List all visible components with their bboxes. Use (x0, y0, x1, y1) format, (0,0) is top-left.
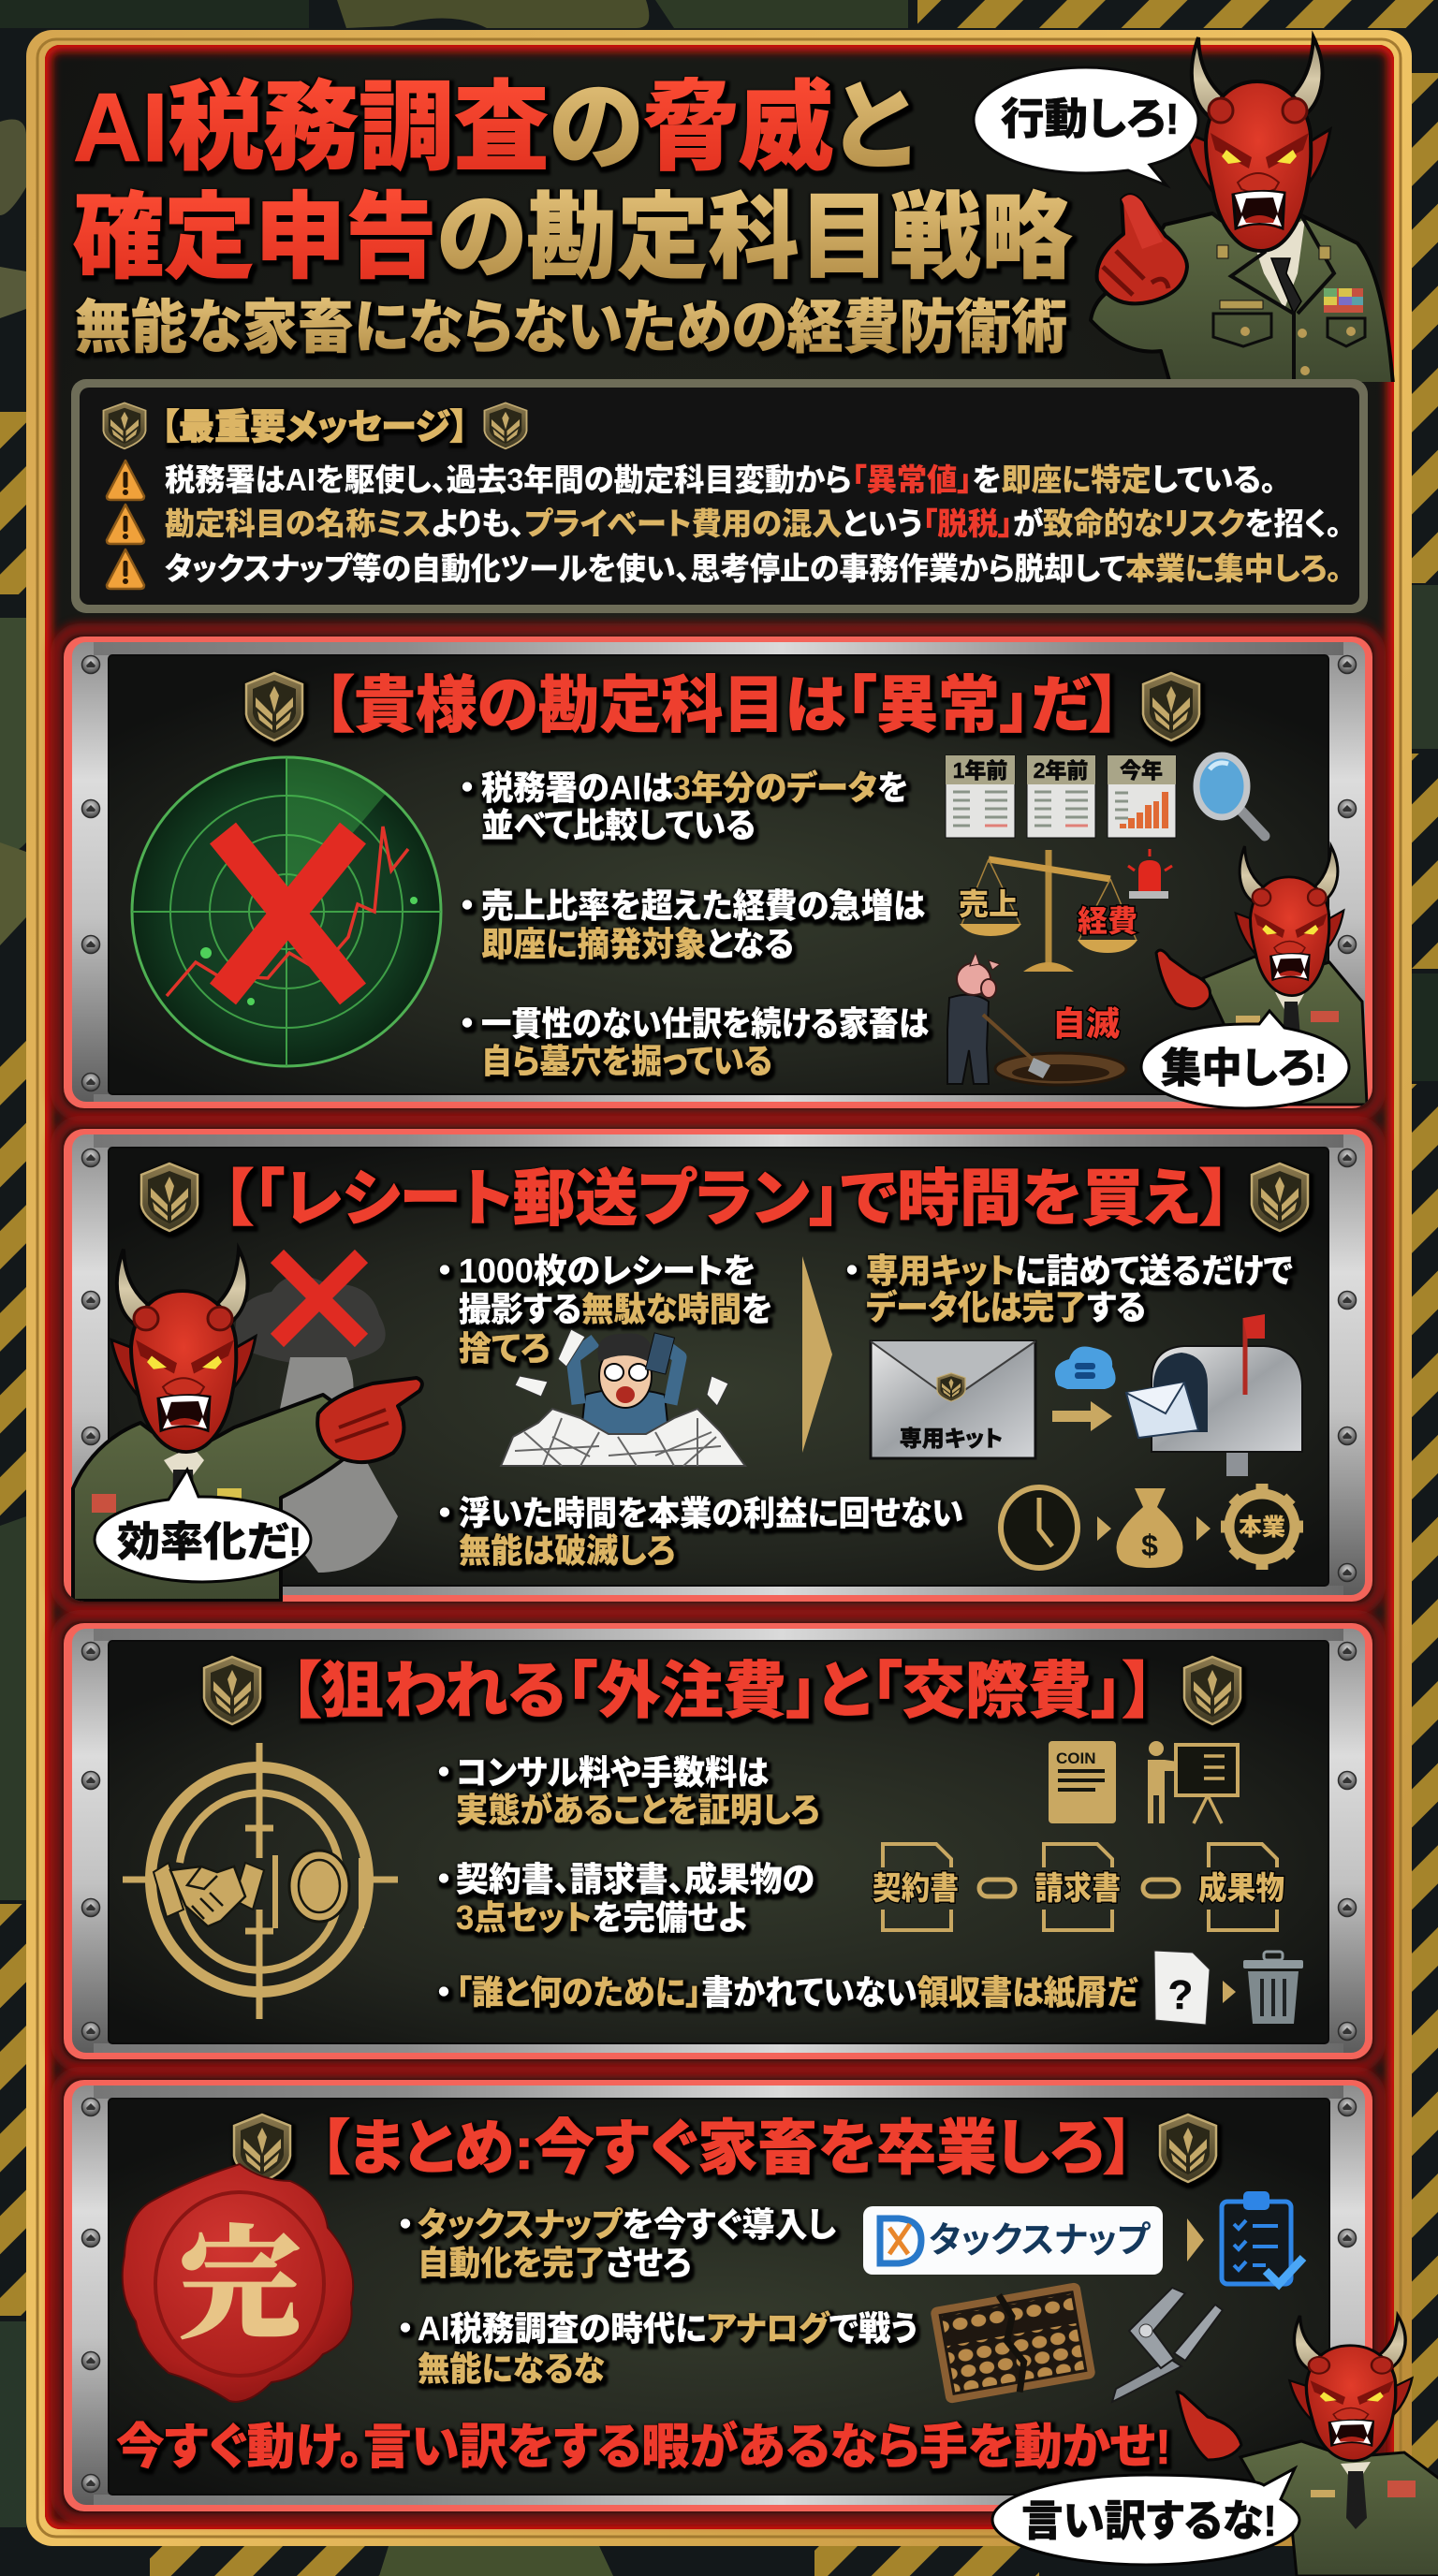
gold arrow to mailbox (1052, 1401, 1112, 1431)
devil body and pointing hand (73, 1378, 422, 1601)
dedicated kit envelope: 専用キット (900, 1427, 1003, 1452)
devil body and pointing hand (1156, 950, 1367, 1105)
panel 3 text: 実態があることを証明しろ (456, 1791, 819, 1829)
dedicated kit envelope (871, 1341, 1035, 1458)
panel 3 text: 3点セットを完備せよ (456, 1898, 747, 1937)
document: invoice (1034, 1844, 1121, 1930)
devil commander 4 with speech bubble (992, 2316, 1438, 2576)
devil commander 3 with speech bubble (73, 1249, 422, 1601)
pig-headed man digging a hole (947, 953, 1126, 1085)
chain link (1143, 1880, 1179, 1896)
title line 1: AI税務調査の脅威と (73, 74, 913, 183)
wax seal (123, 2164, 353, 2402)
speech bubble: 効率化だ (95, 1470, 311, 1582)
three-year comparison tables (946, 755, 1176, 838)
panel 1 text: 自ら墓穴を掘っている (481, 1042, 772, 1080)
document: contract (873, 1844, 959, 1930)
TaxSnap logo (863, 2206, 1163, 2275)
panel 1 text: 即座に摘発対象となる (481, 925, 794, 963)
balance scale (959, 850, 1137, 972)
title (73, 74, 1072, 360)
time, money, business icons (1001, 1484, 1303, 1570)
gear icon (1221, 1484, 1303, 1570)
three-year comparison tables: 1年前 (953, 758, 1007, 783)
panel 4 text: 自動化を完了させろ (418, 2244, 691, 2282)
speech bubble: 集中しろ: 集中しろ! (1161, 1046, 1328, 1091)
balance scale: 経費 (1078, 904, 1137, 938)
panel 3: targeted outsourcing and entertainment expenses (56, 1616, 1380, 2067)
panel 1 heading: 【貴様の勘定科目は「異常」だ】 (323, 670, 1121, 739)
divider chevron (802, 1256, 832, 1453)
red X mark (277, 1256, 361, 1340)
broken abacus (933, 2281, 1093, 2405)
panel 1 frame (56, 629, 1380, 1116)
money bag icon: $ (1141, 1529, 1158, 1562)
three-year comparison tables: 2年前 (1034, 758, 1088, 783)
panel 1 text: ・ (459, 1004, 476, 1043)
three-year comparison tables: 今年 (1120, 758, 1163, 783)
panel 3 text (435, 1753, 1138, 2012)
document: deliverable (1198, 1844, 1284, 1930)
wax seal: 完 (179, 2188, 301, 2363)
broken pen (1112, 2288, 1223, 2402)
small arrow (1187, 2218, 1204, 2261)
panel 2 right text: データ化は完了する (866, 1288, 1146, 1326)
panel 2 frame (56, 1121, 1380, 1609)
panel 2 left text: 捨てろ (459, 1329, 550, 1368)
contract icon (1049, 1741, 1116, 1823)
panel 1 text: ・ (459, 768, 476, 807)
three document set (873, 1844, 1284, 1930)
panel 1 text: 一貫性のない仕訳を続ける家畜は (481, 1004, 929, 1043)
data cloud (1055, 1346, 1116, 1389)
panel 1: your accounts are abnormal (56, 629, 1380, 1116)
panel 4 text: 無能になるな (418, 2349, 605, 2388)
speech bubble: 言い訳するな (992, 2468, 1299, 2565)
panel 2 bottom text: 浮いた時間を本業の利益に回せない (459, 1494, 963, 1532)
message line 3: タックスナップ等の自動化ツールを使い、思考停止の事務作業から脱却して本業に集中しろ。 (165, 551, 1342, 586)
clipboard checklist (1222, 2191, 1303, 2284)
subtitle: 無能な家畜にならないための経費防衛術 (75, 296, 1067, 360)
message line 1: 税務署はAIを駆使し、過去3年間の勘定科目変動から「異常値」を即座に特定している。 (165, 462, 1276, 497)
panel 2 bottom text: 無能は破滅しろ (459, 1531, 675, 1570)
receipt with question mark (1154, 1951, 1210, 2025)
panel 4 heading: 【まとめ:今すぐ家畜を卒業しろ】 (319, 2115, 1134, 2182)
message line 2: 勘定科目の名称ミスよりも、プライベート費用の混入という「脱税」が致命的なリスクを招く。 (165, 506, 1342, 541)
panel 2 right text (844, 1251, 1293, 1326)
TaxSnap logo: タックスナップ (929, 2221, 1152, 2261)
title line 2: 確定申告の勘定科目戦略 (73, 185, 1072, 290)
panel 3 text: 「誰と何のために」書かれていない領収書は紙屑だ (456, 1973, 1138, 2012)
speech bubble: 効率化だ: 効率化だ! (117, 1519, 302, 1565)
presenter icon (1148, 1741, 1238, 1823)
panel 4 text: ・ (397, 2309, 414, 2348)
mailbox with envelope (1126, 1314, 1302, 1476)
panicked man buried in receipts (501, 1329, 745, 1466)
panel 1 text: ・ (459, 886, 476, 925)
handshake (154, 1863, 264, 1926)
panel 2 left text (436, 1251, 772, 1368)
devil commander 1 with speech bubble (974, 37, 1393, 384)
panel 3 text: ・ (435, 1973, 452, 2012)
speech bubble: 言い訳するな: 言い訳するな! (1021, 2496, 1277, 2545)
panel 4 frame (56, 2072, 1380, 2519)
panel 2 bottom text (436, 1494, 963, 1570)
panel 4 text: タックスナップを今すぐ導入し (418, 2205, 836, 2244)
receipt with question mark: ? (1168, 1972, 1193, 2018)
speech bubble: 集中しろ (1141, 1011, 1349, 1108)
key message box (71, 379, 1368, 613)
panel 3 text: 契約書、請求書、成果物の (456, 1860, 814, 1898)
panel 2 left text: 撮影する無駄な時間を (459, 1290, 772, 1328)
panel 1 text: 税務署のAIは3年分のデータを (481, 768, 908, 807)
devil commander 2 with speech bubble (1141, 846, 1367, 1108)
gear icon: 本業 (1239, 1515, 1285, 1541)
document: deliverable: 成果物 (1198, 1870, 1284, 1907)
trash can (1243, 1952, 1303, 2024)
smoke and ghost behind the devil (236, 1276, 398, 1573)
magnifying glass (1196, 755, 1265, 836)
panel 2 bottom text: ・ (436, 1494, 453, 1532)
panel 2 right text: 専用キットに詰めて送るだけで (866, 1251, 1293, 1290)
red alarm beacon (1128, 849, 1172, 899)
panel 2 right text: ・ (844, 1251, 860, 1290)
panel 3 heading: 【狙われる「外注費」と「交際費」】 (289, 1656, 1154, 1725)
fork and plate (275, 1851, 361, 1928)
panel 2: buy time with the receipt mailing plan (56, 1121, 1380, 1609)
call to action: 今すぐ動け。言い訳をする暇があるなら手を動かせ! (116, 2420, 1171, 2475)
panel 3 text: コンサル料や手数料は (456, 1753, 769, 1792)
message shields (103, 402, 526, 448)
balance scale: 売上 (959, 887, 1019, 921)
panel 1 text: 売上比率を超えた経費の急増は (481, 886, 925, 925)
panel 4: summary, graduate from livestock now (56, 2072, 1380, 2519)
panel 4 text: AI税務調査の時代にアナログで戦う (418, 2309, 917, 2348)
panel 1 text: 並べて比較している (481, 806, 756, 844)
small arrow (1223, 1981, 1236, 2003)
devil body and pointing hand (1091, 37, 1393, 384)
panel 4 text: ・ (397, 2205, 414, 2244)
document: contract: 契約書 (873, 1871, 959, 1907)
small arrow (1097, 1516, 1111, 1541)
panel 3 frame (56, 1616, 1380, 2067)
clock icon (1001, 1487, 1078, 1568)
panel 2 left text: 1000枚のレシートを (459, 1251, 756, 1290)
devil body and pointing hand (1177, 2392, 1438, 2576)
speech bubble: 行動しろ (974, 67, 1198, 185)
chain link (979, 1880, 1015, 1896)
money bag icon (1117, 1488, 1183, 1568)
panel 1 text (459, 768, 929, 1080)
pig-headed man digging a hole: 自滅 (1052, 1004, 1120, 1043)
document: invoice: 請求書 (1034, 1871, 1121, 1907)
small arrow (1196, 1516, 1211, 1541)
panel 3 text: ・ (435, 1753, 452, 1792)
message heading: 【最重要メッセージ】 (161, 408, 468, 447)
panel 2 left text: ・ (436, 1251, 453, 1290)
panel 3 text: ・ (435, 1860, 452, 1898)
contract icon: COIN (1056, 1749, 1095, 1767)
crosshair with handshake and plate (123, 1743, 398, 2019)
radar with red X (132, 757, 441, 1066)
speech bubble: 行動しろ: 行動しろ! (1001, 95, 1180, 143)
panel 2 heading: 【「レシート郵送プラン」で時間を買え】 (222, 1164, 1231, 1233)
panel 4 text (397, 2205, 917, 2388)
